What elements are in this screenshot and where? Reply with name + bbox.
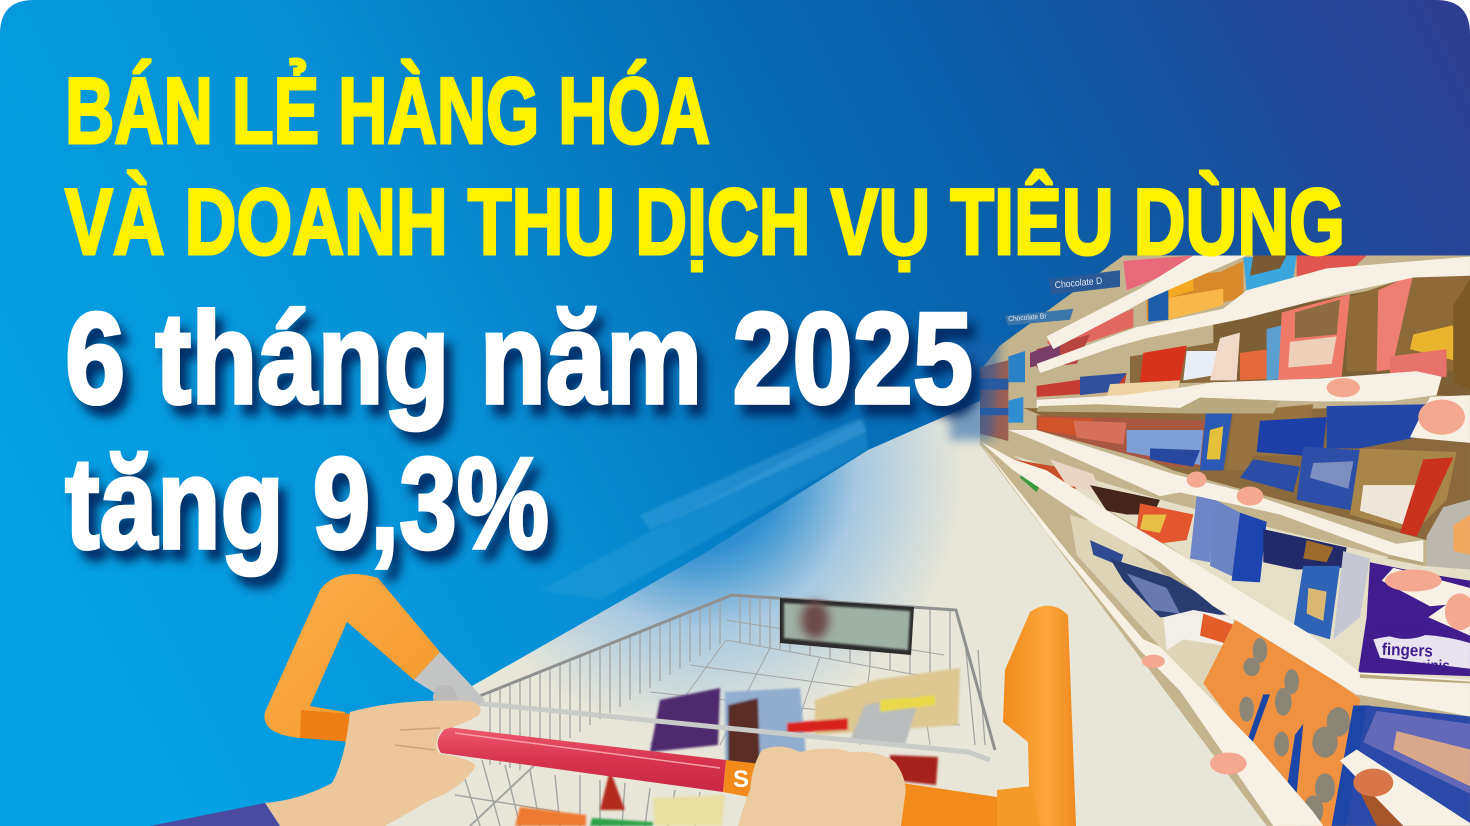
rim wires xyxy=(477,595,995,750)
fifth row orange boxes xyxy=(1070,514,1370,826)
left receding products xyxy=(980,342,1180,441)
title line 1: BÁN LẺ HÀNG HÓA xyxy=(65,58,710,163)
store aisle signs xyxy=(1005,270,1120,325)
ghost shelf fading into background xyxy=(540,418,868,600)
shopping cart basket xyxy=(455,595,995,826)
upper left products xyxy=(1037,309,1133,368)
back wall and side wires xyxy=(490,596,985,770)
shelf lip shading xyxy=(1037,398,1470,683)
subtitle line 1: 6 tháng năm 2025 xyxy=(65,285,973,431)
icon: Cadbury fingers box xyxy=(1358,562,1470,676)
fourth row snacks xyxy=(1013,456,1470,683)
price tags xyxy=(1142,378,1470,797)
floor grid wires xyxy=(650,620,960,745)
subtitle line 2: tăng 9,3% xyxy=(65,430,549,576)
right orange cart handle xyxy=(997,606,1076,826)
orange bar segment xyxy=(723,760,756,797)
title: yellow heading xyxy=(65,58,1345,274)
cart front rail xyxy=(465,702,990,760)
bar brand text: S xyxy=(733,766,749,793)
subtitle: white heading with shadow xyxy=(65,285,973,576)
right hand xyxy=(738,746,906,826)
third row snacks xyxy=(1023,404,1470,577)
left orange cart handle xyxy=(264,574,440,738)
right handle collar xyxy=(997,786,1040,826)
product label: fingers xyxy=(1381,640,1433,661)
shelf lips xyxy=(980,256,1470,826)
left hand and sleeve xyxy=(150,700,481,826)
left handle collar xyxy=(300,710,352,742)
sleeve xyxy=(150,803,280,826)
goods in cart xyxy=(515,668,960,826)
sign text: Chocolate D xyxy=(1054,275,1103,290)
shelf backdrop xyxy=(980,256,1470,826)
bottom right biscuit boxes xyxy=(1347,705,1470,826)
second row products xyxy=(1130,272,1470,397)
lower wires xyxy=(455,760,700,826)
top row products xyxy=(1123,256,1367,322)
fade from blue into shelves xyxy=(950,340,1000,440)
orange bar right segment xyxy=(895,782,997,826)
cart display screen xyxy=(780,598,914,655)
product sublabel: minis xyxy=(1415,657,1450,674)
supermarket shelves xyxy=(980,256,1470,826)
sign text: Chocolate Br xyxy=(1008,313,1047,323)
red cart handle bar xyxy=(438,727,997,826)
cart hinge xyxy=(414,652,485,702)
bar highlight xyxy=(455,733,720,768)
supermarket floor xyxy=(300,400,1300,826)
